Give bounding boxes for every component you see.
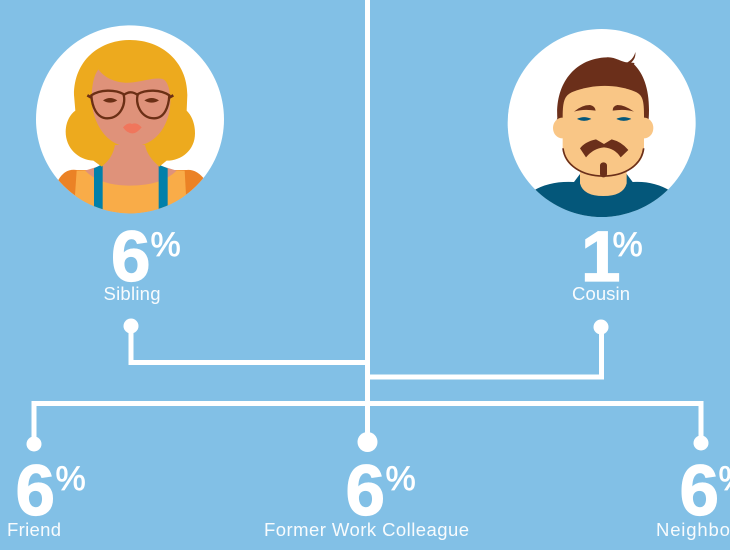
stat: cousin 1%: % xyxy=(612,226,643,264)
stat: friend 6%: Friend xyxy=(7,519,61,540)
stat: former work colleague 6%: Former Work Colleague xyxy=(264,519,469,540)
dot: cousin xyxy=(594,320,608,334)
dot: neighbour xyxy=(694,436,708,450)
beard line xyxy=(563,148,644,176)
connector lines xyxy=(34,0,701,444)
stat: friend 6%: 6 xyxy=(16,452,55,531)
eyes xyxy=(577,117,591,121)
stat: sibling 6%: 6 xyxy=(111,218,150,297)
face xyxy=(92,69,170,147)
stat: cousin 1%: Cousin xyxy=(572,283,630,304)
goatee xyxy=(600,162,607,177)
hair xyxy=(66,40,195,167)
stat: former work colleague 6%: 6 xyxy=(346,452,385,531)
stat: former work colleague 6% xyxy=(264,452,469,540)
dot: sibling xyxy=(124,318,138,334)
stat: former work colleague 6%: % xyxy=(386,460,416,498)
hair xyxy=(557,52,649,119)
neck xyxy=(580,172,627,196)
ears xyxy=(553,118,563,138)
glasses xyxy=(87,91,173,118)
dot: former work colleague xyxy=(358,432,378,452)
eyes xyxy=(103,98,117,103)
face xyxy=(563,86,644,177)
dot: friend xyxy=(26,436,42,452)
stat: friend 6%: % xyxy=(56,460,86,498)
stat: sibling 6% xyxy=(104,218,181,304)
stat: sibling 6%: % xyxy=(150,226,181,264)
icon: man avatar xyxy=(508,29,696,227)
stat: cousin 1% xyxy=(572,218,643,304)
shirt xyxy=(535,174,668,217)
lips xyxy=(123,123,142,133)
stat: cousin 1%: 1 xyxy=(581,218,620,297)
body xyxy=(58,170,204,214)
stat: neighbour 6%: 6 xyxy=(680,452,719,531)
eyebrows xyxy=(574,105,596,112)
straps xyxy=(94,164,103,210)
icon: woman avatar xyxy=(36,25,224,227)
stat: friend 6% xyxy=(7,452,86,540)
stat: neighbour 6% xyxy=(656,452,730,540)
neck and chest xyxy=(85,145,176,186)
moustache xyxy=(580,139,628,157)
stat: sibling 6%: Sibling xyxy=(104,283,160,304)
